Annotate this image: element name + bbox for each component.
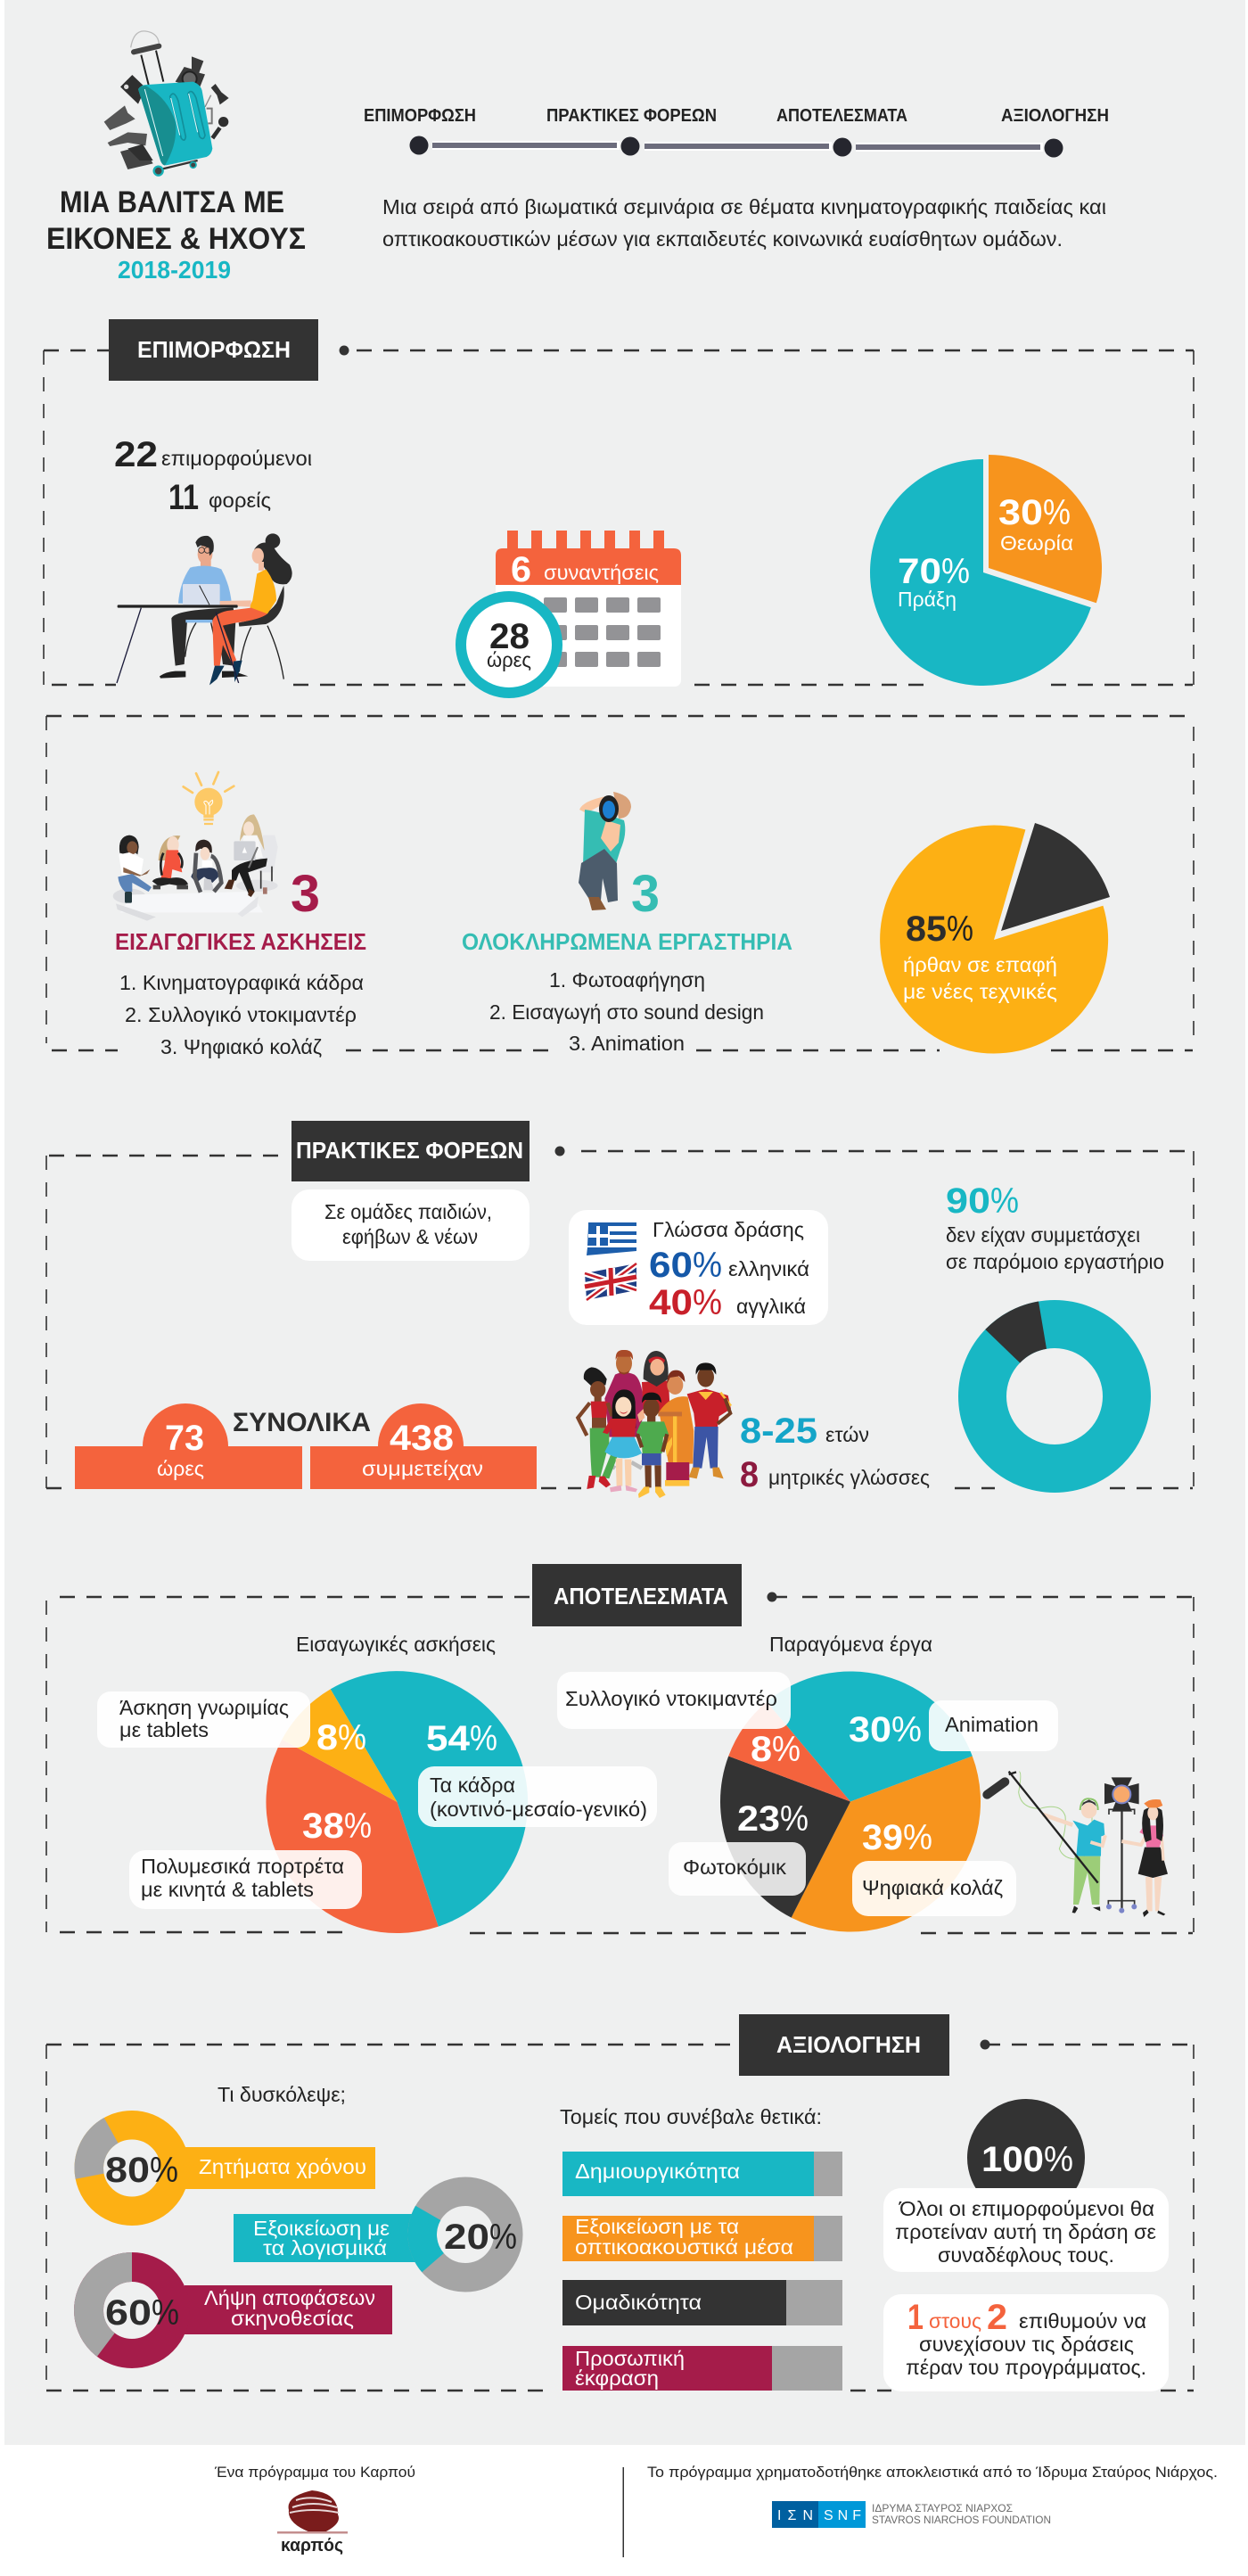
callout: target groups (291, 1189, 530, 1261)
donut: time issues 80 percent: 80 (105, 2151, 150, 2190)
pie chart: produced works: 8 (751, 1730, 772, 1769)
bar: media familiarity: οπτικοακουστικά μέσα (575, 2235, 793, 2259)
stat: trainees and organisations: επιμορφούμενοι (161, 447, 312, 470)
pie chart: 85 percent new techniques (880, 823, 1110, 1054)
stat: 100 percent recommend: Όλοι οι επιμορφούμενοι θα (899, 2197, 1154, 2220)
timeline navigation (364, 106, 1109, 157)
pie chart: introductory exercises: 54 (426, 1719, 471, 1758)
callout: 1 in 2 want to continue: 1 (907, 2298, 924, 2337)
pie chart: theory vs practice: Πράξη (898, 588, 957, 611)
callout: action language: Γλώσσα δράσης (653, 1218, 804, 1241)
callout: 1 in 2 want to continue: συνεχίσουν τις δράσεις (919, 2333, 1134, 2356)
chart title: difficulties: Τι δυσκόλεψε; (218, 2083, 346, 2106)
title (46, 185, 306, 284)
stat block: total hours (75, 1403, 302, 1489)
bar: media familiarity: Εξοικείωση με τα (575, 2215, 739, 2238)
heading: practices: ΠΡΑΚΤΙΚΕΣ ΦΟΡΕΩΝ (296, 1137, 523, 1164)
stat: 3 introductory exercises: 3 (291, 865, 320, 923)
icon: calendar (496, 531, 681, 687)
logo: Stavros Niarchos Foundation: STAVROS NIARCHOS FOUNDATION (872, 2514, 1051, 2526)
callout: 1 in 2 want to continue (883, 2294, 1169, 2391)
stat: ages: ετών (825, 1423, 869, 1446)
callout: action language: 60 (649, 1246, 693, 1285)
stat: 3 introductory exercises: 3. Ψηφιακό κολάζ (160, 1035, 322, 1058)
pie chart: 85 percent new techniques: % (947, 909, 973, 949)
callout: 1 in 2 want to continue: πέραν του προγράμματος. (906, 2356, 1146, 2379)
timeline navigation: ΠΡΑΚΤΙΚΕΣ ΦΟΡΕΩΝ (546, 106, 717, 126)
donut: directing decisions 60 percent: % (152, 2293, 179, 2333)
credit: programme by Karpos (214, 2464, 415, 2555)
callout: photocomic (669, 1842, 806, 1896)
icon: suitcase with media equipment (104, 31, 229, 176)
heading: results (532, 1564, 777, 1626)
bar: personal expression: Προσωπική (575, 2347, 685, 2370)
heading: evaluation (739, 2014, 989, 2076)
timeline navigation: ΕΠΙΜΟΡΦΩΣΗ (364, 106, 476, 126)
label: total: ΣΥΝΟΛΙΚΑ (233, 1408, 371, 1437)
stat block: total participants (310, 1403, 537, 1489)
donut: software familiarity 20 percent: Εξοικείωση με (253, 2217, 390, 2240)
logo: Stavros Niarchos Foundation: ΙΔΡΥΜΑ ΣΤΑΥΡΟΣ ΝΙΑΡΧΟΣ (872, 2502, 1013, 2514)
intro text (382, 195, 1106, 251)
pie chart: produced works: 30 (849, 1710, 891, 1749)
panel: results (46, 1564, 1194, 1933)
timeline navigation: ΑΞΙΟΛΟΓΗΣΗ (1001, 106, 1109, 126)
pie chart: theory vs practice: % (1043, 493, 1071, 532)
bar: personal expression (562, 2346, 842, 2391)
pie chart: produced works: 39 (862, 1818, 903, 1857)
callout: tablets exercise: Άσκηση γνωριμίας (119, 1696, 289, 1719)
panel: evaluation (46, 2014, 1194, 2391)
callout: action language: ελληνικά (728, 1257, 809, 1280)
stat block: total participants: 438 (390, 1419, 454, 1458)
stat: 90 percent first participation: δεν είχαν συμμετάσχει (946, 1223, 1140, 1247)
illustration: two people at a desk (117, 533, 292, 685)
stat: 3 complete workshops (462, 865, 792, 1055)
title: 2018-2019 (118, 256, 231, 284)
bar: personal expression: έκφραση (575, 2366, 659, 2390)
stat: 90 percent first participation: 90 (946, 1181, 990, 1221)
callout: action language: % (693, 1283, 722, 1322)
icon: clock with hours: ώρες (487, 648, 531, 671)
pie chart: theory vs practice: Θεωρία (1000, 531, 1073, 555)
stat: 3 introductory exercises: ΕΙΣΑΓΩΓΙΚΕΣ ΑΣΚΗΣΕΙΣ (115, 928, 366, 955)
stat: trainees and organisations: 11 (168, 478, 199, 517)
chart title: exercises: Εισαγωγικές ασκήσεις (296, 1633, 496, 1656)
stat: 3 introductory exercises (115, 865, 366, 1058)
pie chart: introductory exercises: % (338, 1718, 366, 1757)
callout: target groups: εφήβων & νέων (342, 1225, 478, 1248)
callout: animation: Animation (945, 1713, 1039, 1736)
illustration: film crew with boom and light (987, 1772, 1168, 1917)
callout: multimedia portraits: Πολυμεσικά πορτρέτα (141, 1855, 344, 1878)
callout: tablets exercise: με tablets (119, 1718, 209, 1741)
credit: funder: Το πρόγραμμα χρηματοδοτήθηκε αποκλειστικά από το Ίδρυμα Σταύρος Νιάρχος. (647, 2464, 1218, 2481)
icon: clock with hours: 28 (489, 617, 530, 656)
stat block: total hours: 73 (165, 1419, 204, 1458)
illustration: diverse group of young people (578, 1350, 731, 1498)
stat: trainees and organisations: 22 (114, 435, 158, 474)
donut: software familiarity 20 percent (234, 2192, 517, 2277)
callout: animation (929, 1700, 1058, 1751)
pie chart: produced works: 23 (737, 1799, 780, 1839)
donut: software familiarity 20 percent: τα λογισμικά (263, 2236, 387, 2259)
bar: media familiarity (562, 2215, 842, 2261)
donut: directing decisions 60 percent: Λήψη αποφάσεων (204, 2286, 375, 2309)
stat: 3 complete workshops: ΟΛΟΚΛΗΡΩΜΕΝΑ ΕΡΓΑΣΤΗΡΙΑ (462, 928, 792, 955)
heading: results: ΑΠΟΤΕΛΕΣΜΑΤΑ (554, 1583, 728, 1609)
callout: photocomic: Φωτοκόμικ (683, 1856, 787, 1879)
heading: evaluation: ΑΞΙΟΛΟΓΗΣΗ (776, 2031, 921, 2058)
pie chart: 85 percent new techniques: 85 (906, 909, 947, 949)
donut: time issues 80 percent: Ζητήματα χρόνου (199, 2155, 366, 2178)
callout: frames: Τα κάδρα (430, 1774, 515, 1797)
callout: frames (418, 1766, 657, 1827)
pie chart: introductory exercises: 8 (316, 1718, 338, 1757)
callout: collective documentary (557, 1672, 791, 1729)
intro text: οπτικοακουστικών μέσων για εκπαιδευτές κοινωνικά ευαίσθητων ομάδων. (382, 227, 1063, 251)
stat: ages (740, 1411, 869, 1451)
callout: target groups: Σε ομάδες παιδιών, (324, 1200, 492, 1223)
callout: collective documentary: Συλλογικό ντοκιμαντέρ (565, 1687, 777, 1710)
logo: Stavros Niarchos Foundation: SNF (824, 2508, 861, 2523)
stat: mother tongues (740, 1455, 930, 1494)
pie chart: theory vs practice (870, 455, 1102, 686)
icon: calendar: 6 (511, 550, 531, 589)
stat: mother tongues: 8 (740, 1455, 759, 1494)
illustration: photographer (579, 792, 631, 910)
stat: 3 introductory exercises: 2. Συλλογικό ντοκιμαντέρ (125, 1003, 357, 1026)
stat: 3 introductory exercises: 1. Κινηματογραφικά κάδρα (119, 971, 364, 994)
callout: frames: (κοντινό-μεσαίο-γενικό) (430, 1798, 647, 1821)
stat: 90 percent first participation: % (990, 1181, 1019, 1221)
header (46, 31, 1109, 284)
pie chart: theory vs practice: 70 (898, 552, 941, 591)
callout: multimedia portraits (129, 1850, 362, 1909)
stat: 100 percent recommend: συναδέφλους τους. (938, 2243, 1114, 2267)
stat: 100 percent recommend: % (1044, 2140, 1073, 2179)
pie chart: introductory exercises: % (344, 1806, 372, 1846)
callout: digital collage: Ψηφιακά κολάζ (862, 1876, 1003, 1899)
donut: time issues 80 percent: % (150, 2151, 178, 2190)
stat: ages: 8-25 (740, 1411, 817, 1451)
title: ΕΙΚΟΝΕΣ & ΗΧΟΥΣ (46, 222, 306, 256)
panel: training overview (44, 319, 1194, 693)
bar: creativity: Δημιουργικότητα (575, 2160, 740, 2183)
donut: software familiarity 20 percent: % (489, 2218, 517, 2257)
donut: directing decisions 60 percent: 60 (105, 2293, 152, 2333)
donut: directing decisions 60 percent: σκηνοθεσίας (231, 2307, 354, 2330)
bar: teamwork (562, 2280, 842, 2325)
stat: 100 percent recommend (883, 2099, 1169, 2272)
callout: 1 in 2 want to continue: στους (929, 2309, 981, 2333)
intro text: Μια σειρά από βιωματικά σεμινάρια σε θέματα κινηματογραφικής παιδείας και (382, 195, 1106, 218)
pie chart: produced works: % (891, 1710, 922, 1749)
callout: digital collage (852, 1861, 1016, 1916)
title: ΜΙΑ ΒΑΛΙΤΣΑ ΜΕ (60, 185, 284, 219)
donut: software familiarity 20 percent: 20 (444, 2218, 489, 2257)
donut: directing decisions 60 percent (74, 2252, 392, 2357)
icon: clock with hours (461, 597, 557, 693)
pie chart: theory vs practice: 30 (998, 493, 1043, 532)
logo: walnut: καρπός (281, 2536, 343, 2555)
donut chart: 90 percent (982, 1302, 1127, 1469)
stat: 3 complete workshops: 2. Εισαγωγή στο sound design (489, 1000, 764, 1024)
callout: action language: 40 (649, 1283, 693, 1322)
donut: time issues 80 percent (74, 2118, 375, 2211)
pie chart: produced works: % (780, 1799, 809, 1839)
pie chart: 85 percent new techniques: με νέες τεχνικές (903, 980, 1057, 1003)
heading: training: ΕΠΙΜΟΡΦΩΣΗ (137, 336, 291, 363)
chart title: produced works: Παραγόμενα έργα (769, 1633, 932, 1656)
callout: 1 in 2 want to continue: επιθυμούν να (1019, 2309, 1146, 2333)
stat: mother tongues: μητρικές γλώσσες (768, 1466, 930, 1489)
icon: Greek flag (587, 1222, 636, 1255)
logo: walnut (277, 2490, 348, 2555)
icon: UK flag (585, 1263, 636, 1300)
heading: training (109, 319, 349, 381)
pie chart: introductory exercises (266, 1671, 528, 1933)
bar: creativity (562, 2152, 842, 2196)
pie chart: introductory exercises: % (470, 1719, 497, 1758)
stat: 90 percent first participation (946, 1181, 1164, 1273)
pie chart: 85 percent new techniques: ήρθαν σε επαφή (903, 953, 1057, 976)
panel: exercises and workshops (46, 716, 1194, 1058)
pie chart: produced works (720, 1672, 981, 1932)
callout: action language (569, 1210, 828, 1325)
stat: 90 percent first participation: σε παρόμοιο εργαστήριο (946, 1250, 1164, 1273)
chart title: positive areas: Τομείς που συνέβαλε θετικά: (560, 2105, 822, 2128)
pie chart: produced works: % (772, 1730, 801, 1769)
logo: Stavros Niarchos Foundation: ΙΣΝ (777, 2508, 813, 2523)
stat: trainees and organisations: φορείς (209, 489, 271, 512)
callout: action language: αγγλικά (736, 1295, 806, 1318)
stat: 100 percent recommend: προτείναν αυτή τη δράση σε (895, 2220, 1156, 2243)
stat block: total hours: ώρες (157, 1457, 204, 1480)
footer (214, 2464, 1218, 2557)
credit: funder (647, 2464, 1218, 2528)
stat: 3 complete workshops: 3. Animation (569, 1032, 685, 1055)
stat: 3 complete workshops: 3 (631, 865, 660, 923)
logo: Stavros Niarchos Foundation (772, 2501, 1051, 2528)
timeline navigation: ΑΠΟΤΕΛΕΣΜΑΤΑ (776, 106, 907, 126)
callout: 1 in 2 want to continue: 2 (987, 2298, 1007, 2337)
credit: programme by Karpos: Ένα πρόγραμμα του Καρπού (214, 2464, 415, 2481)
pie chart: introductory exercises: 38 (302, 1806, 344, 1846)
pie chart: theory vs practice: % (941, 552, 970, 591)
callout: multimedia portraits: με κινητά & tablets (141, 1878, 314, 1901)
illustration: students around a lightbulb (113, 772, 278, 921)
stat: 3 complete workshops: 1. Φωτοαφήγηση (549, 968, 705, 992)
callout: tablets exercise (97, 1691, 310, 1748)
bar: teamwork: Ομαδικότητα (575, 2291, 702, 2314)
icon: calendar: συναντήσεις (544, 561, 659, 584)
stat block: total participants: συμμετείχαν (362, 1457, 483, 1480)
stat: trainees and organisations (114, 435, 312, 517)
heading: practices (291, 1121, 565, 1181)
panel: organisation practices (46, 1121, 1194, 1498)
stat: 100 percent recommend: 100 (981, 2140, 1044, 2179)
pie chart: produced works: % (903, 1818, 932, 1857)
callout: action language: % (693, 1246, 722, 1285)
